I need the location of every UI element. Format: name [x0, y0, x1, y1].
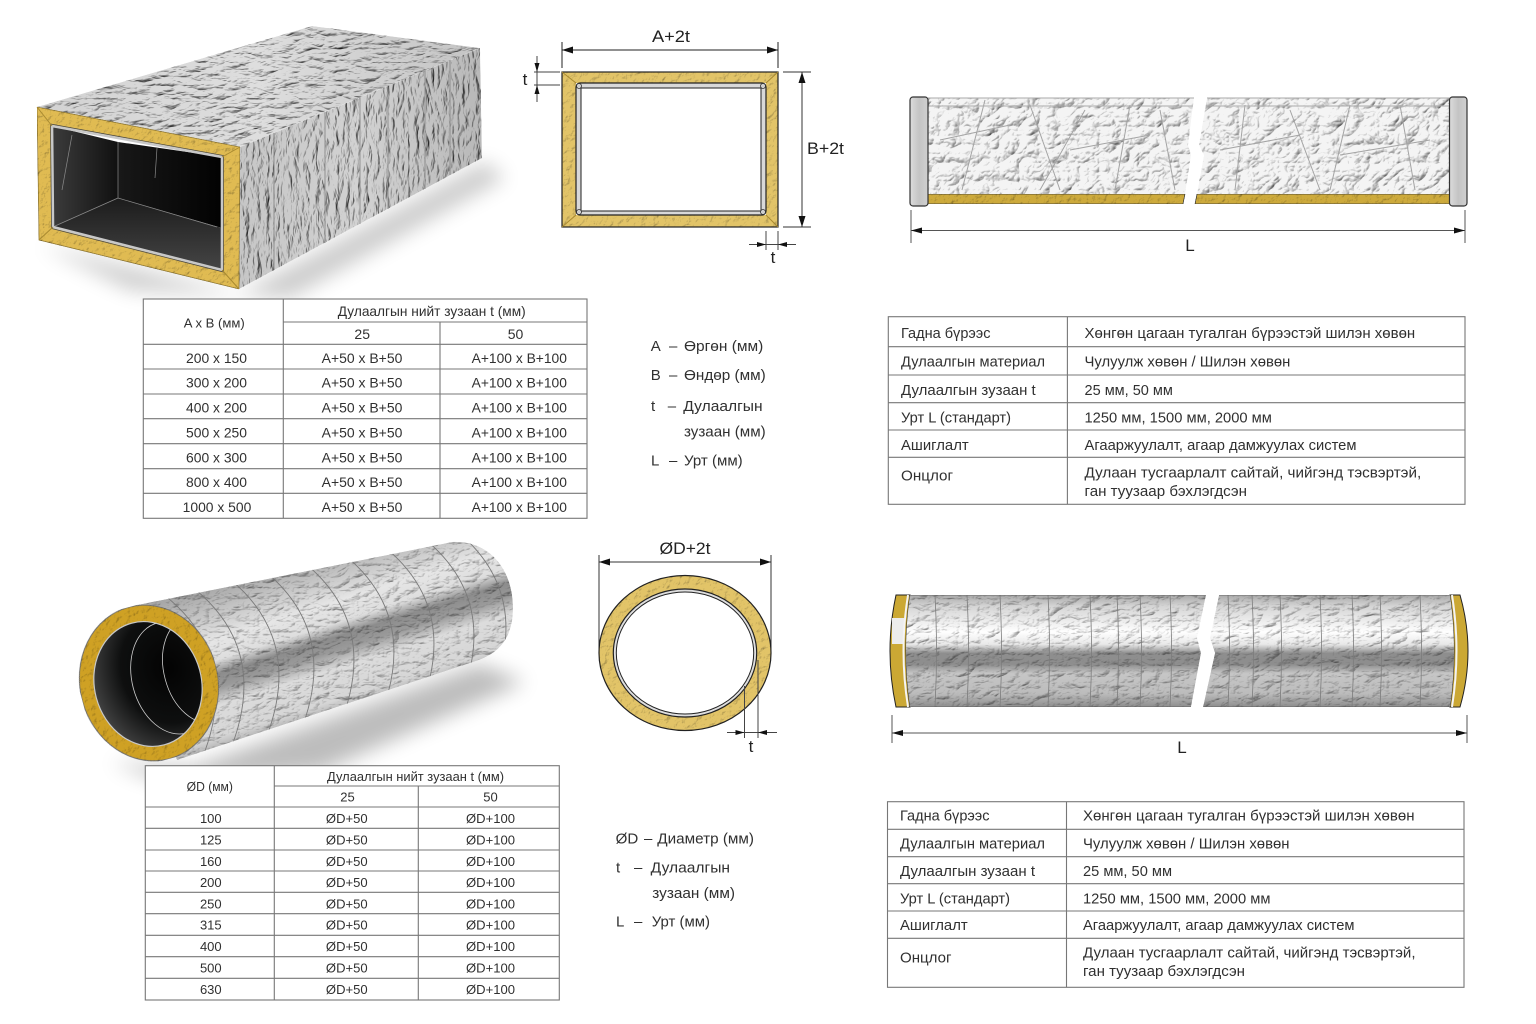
legend: round duct symbols: – — [634, 913, 643, 930]
duct metal frame — [52, 126, 222, 270]
table text: 400 x 200 — [186, 400, 247, 416]
round spec text: 1250 мм, 1500 мм, 2000 мм — [1083, 891, 1270, 907]
dimension t round: t — [749, 737, 754, 756]
spec text: Ашиглалт — [901, 438, 969, 454]
legend: rectangular duct symbols: зузаан (мм) — [684, 424, 766, 441]
round table text: Дулаалгын нийт зузаан t (мм) — [327, 769, 504, 784]
table: round duct sizes — [145, 766, 559, 1000]
table text: 25 — [354, 326, 370, 342]
section metal liner — [576, 83, 766, 215]
round table text: 100 — [200, 811, 222, 826]
shadow: rectangular duct — [40, 162, 505, 298]
round table text: ØD+100 — [466, 896, 515, 911]
round spec text: ган туузаар бэхлэгдсэн — [1083, 964, 1245, 980]
table text: 1000 x 500 — [183, 499, 252, 515]
round section outline — [599, 576, 771, 730]
legend: rectangular duct symbols: Өргөн (мм) — [684, 338, 763, 355]
legend: round duct symbols: Диаметр (мм) — [657, 830, 754, 848]
round table text: ØD+100 — [466, 811, 515, 826]
legend: rectangular duct symbols: – — [669, 367, 678, 384]
table text: Дулаалгын нийт зузаан t (мм) — [338, 303, 526, 319]
spec text: Гадна бүрээс — [901, 326, 990, 342]
table text: A+100 x B+100 — [472, 375, 567, 391]
spec text: Онцлог — [901, 469, 953, 485]
section mitre lines — [562, 72, 778, 227]
round table text: 400 — [200, 939, 222, 954]
round spec text: Ашиглалт — [900, 918, 968, 934]
table text: A+50 x B+50 — [322, 424, 403, 440]
table text: 300 x 200 — [186, 375, 247, 391]
table text — [183, 303, 567, 515]
legend: rectangular duct symbols: Өндөр (мм) — [684, 367, 766, 384]
round table text — [187, 769, 515, 997]
table text: 200 x 150 — [186, 350, 247, 366]
round table text: ØD+50 — [326, 811, 368, 826]
round duct seams — [168, 544, 506, 751]
round table text: ØD (мм) — [187, 779, 233, 794]
legend: round duct symbols: зузаан (мм) — [652, 885, 735, 902]
elevation left cap — [910, 97, 928, 206]
table text: 500 x 250 — [186, 424, 247, 440]
spec text: ган туузаар бэхлэгдсэн — [1084, 484, 1247, 500]
spec text: Дулаалгын материал — [901, 355, 1045, 371]
spec text: Агааржуулалт, агаар дамжуулах систем — [1084, 438, 1356, 454]
table: round duct specifications — [888, 802, 1464, 987]
round spec text: 25 мм, 50 мм — [1083, 864, 1172, 880]
elevation top line — [928, 98, 1450, 106]
spec text: Чулуулж хөвөн / Шилэн хөвөн — [1084, 355, 1290, 371]
table text: A+100 x B+100 — [472, 424, 567, 440]
spec text: 25 мм, 50 мм — [1084, 383, 1173, 399]
round duct body — [137, 542, 513, 760]
illustration: round insulated duct — [62, 525, 525, 784]
round spec text — [900, 809, 1416, 980]
round table text: ØD+100 — [466, 939, 515, 954]
round table text: 500 — [200, 961, 222, 976]
table text: A+50 x B+50 — [322, 375, 403, 391]
table text: 800 x 400 — [186, 474, 247, 490]
round spec text: Урт L (стандарт) — [900, 891, 1010, 907]
legend: round duct symbols: t — [616, 860, 621, 877]
round elevation body — [906, 595, 1454, 707]
elevation foil left — [928, 98, 1194, 194]
round table text: ØD+50 — [326, 875, 368, 890]
table text: 600 x 300 — [186, 449, 247, 465]
legend: round duct symbols: – — [644, 830, 653, 848]
round section opening — [616, 592, 754, 714]
duct seams — [274, 60, 450, 270]
round table text: 315 — [200, 918, 222, 933]
elevation insulation strips — [928, 194, 1450, 204]
elevation foil right — [1197, 98, 1450, 194]
section corner bolts — [576, 84, 766, 214]
legend: rectangular duct symbols: B — [651, 367, 661, 384]
dimension B+2t — [783, 72, 844, 227]
round section insulation — [599, 576, 771, 730]
dimension t bottom: t — [771, 248, 776, 267]
legend: rectangular duct symbols: A — [651, 338, 661, 355]
round spec text: Дулаалгын материал — [900, 836, 1045, 852]
section opening — [581, 88, 761, 211]
spec text: Урт L (стандарт) — [901, 411, 1011, 427]
legend: round duct symbols: ØD — [616, 830, 638, 848]
round table text: ØD+100 — [466, 982, 515, 997]
round table text: ØD+100 — [466, 961, 515, 976]
diagram: round cross section — [599, 539, 777, 756]
round duct bore — [80, 609, 216, 759]
table text: A+50 x B+50 — [322, 350, 403, 366]
dimension L round — [892, 715, 1467, 757]
table text: A+100 x B+100 — [472, 499, 567, 515]
legend: rectangular duct symbols: Урт (мм) — [684, 453, 743, 470]
round table text: ØD+50 — [326, 896, 368, 911]
round table text: ØD+100 — [466, 854, 515, 869]
dimension t left: t — [523, 70, 528, 89]
table text: A+50 x B+50 — [322, 474, 403, 490]
round table text: ØD+50 — [326, 939, 368, 954]
table text: 50 — [508, 326, 523, 342]
table text: A+50 x B+50 — [322, 449, 403, 465]
duct interior — [52, 126, 222, 270]
table: rectangular duct specifications — [888, 317, 1465, 504]
spec grid — [888, 317, 1465, 504]
legend: rectangular duct symbols: Дулаалгын — [683, 398, 763, 415]
elevation right cap — [1450, 97, 1467, 206]
round table text: ØD+50 — [326, 854, 368, 869]
duct mitre lines — [37, 107, 240, 289]
round table text: 25 — [340, 790, 355, 805]
round table text: 250 — [200, 896, 222, 911]
dimension A+2t — [562, 27, 778, 68]
dimension B+2t: B+2t — [807, 139, 844, 158]
round spec text: Хөнгөн цагаан тугалган бүрээстэй шилэн хөвөн — [1083, 809, 1414, 825]
legend: round duct symbols: – — [634, 860, 643, 877]
spec text: Хөнгөн цагаан тугалган бүрээстэй шилэн хөвөн — [1084, 326, 1415, 342]
duct side face — [239, 48, 482, 289]
dimension ØD+2t: ØD+2t — [660, 539, 711, 558]
dimension ØD+2t — [599, 539, 771, 653]
round spec text: Гадна бүрээс — [900, 809, 990, 825]
dimension t round — [727, 660, 777, 756]
round table text: 50 — [483, 790, 498, 805]
legend: round duct symbols: Урт (мм) — [652, 913, 710, 930]
round table text: 125 — [200, 833, 222, 848]
dimension L rectangular: L — [1185, 236, 1195, 255]
legend: rectangular duct symbols — [651, 338, 766, 470]
table text: A+100 x B+100 — [472, 449, 567, 465]
legend: rectangular duct symbols: – — [669, 453, 678, 470]
table text: A+50 x B+50 — [322, 400, 403, 416]
illustration: rectangular insulated duct — [37, 26, 505, 298]
section outline — [562, 72, 778, 227]
legend: round duct symbols: Дулаалгын — [651, 860, 730, 877]
round elevation seams — [910, 595, 1450, 707]
legend: rectangular duct symbols: – — [669, 338, 678, 355]
table grid — [143, 299, 587, 518]
round table text: ØD+100 — [466, 833, 515, 848]
legend: rectangular duct symbols: – — [668, 398, 677, 415]
round table text: ØD+50 — [326, 961, 368, 976]
spec text: 1250 мм, 1500 мм, 2000 мм — [1084, 411, 1272, 427]
table text: A+50 x B+50 — [322, 499, 403, 515]
round elevation right ring — [1450, 595, 1468, 707]
diagram: rectangular cross section — [523, 27, 844, 267]
diagram: rectangular duct side elevation — [910, 97, 1467, 255]
section insulation frame — [562, 72, 778, 227]
table text: A x B (мм) — [184, 316, 245, 331]
round duct inner rings — [130, 624, 194, 734]
diagram: round duct side elevation — [890, 595, 1468, 757]
duct top face — [37, 26, 480, 147]
round elevation left ring — [890, 595, 910, 707]
round spec grid — [888, 802, 1464, 987]
table text: A+100 x B+100 — [472, 474, 567, 490]
round table text: 160 — [200, 854, 222, 869]
round duct insulation ring — [62, 589, 236, 777]
round table text: 200 — [200, 875, 222, 890]
round spec text: Онцлог — [900, 951, 952, 967]
spec text — [901, 326, 1421, 500]
legend: round duct symbols — [616, 830, 754, 930]
spec text: Дулаалгын зузаан t — [901, 383, 1036, 399]
dimension t left — [523, 56, 560, 102]
dimension t bottom — [749, 231, 796, 267]
round spec text: Чулуулж хөвөн / Шилэн хөвөн — [1083, 836, 1290, 852]
table text: A+100 x B+100 — [472, 400, 567, 416]
table: rectangular duct sizes — [143, 299, 587, 518]
legend: round duct symbols: L — [616, 913, 624, 930]
round table text: ØD+50 — [326, 833, 368, 848]
dimension L rectangular — [911, 210, 1465, 255]
legend: rectangular duct symbols: t — [651, 398, 656, 415]
dimension A+2t: A+2t — [652, 27, 690, 46]
round table text: ØD+50 — [326, 918, 368, 933]
duct insulation front — [37, 107, 240, 289]
round section liner — [613, 589, 757, 717]
round spec text: Дулаан тусгаарлалт сайтай, чийгэнд тэсвэртэй, — [1083, 946, 1416, 962]
round spec text: Агааржуулалт, агаар дамжуулах систем — [1083, 918, 1354, 934]
round table text: ØD+50 — [326, 982, 368, 997]
round table text: ØD+100 — [466, 875, 515, 890]
round spec text: Дулаалгын зузаан t — [900, 864, 1035, 880]
dimension L round: L — [1177, 738, 1187, 757]
shadow: round duct — [110, 664, 525, 784]
table text: A+100 x B+100 — [472, 350, 567, 366]
round table text: ØD+100 — [466, 918, 515, 933]
round table grid — [145, 766, 559, 1000]
round table text: 630 — [200, 982, 222, 997]
spec text: Дулаан тусгаарлалт сайтай, чийгэнд тэсвэртэй, — [1084, 466, 1421, 482]
elevation creases — [940, 100, 1430, 190]
legend: rectangular duct symbols: L — [651, 453, 659, 470]
